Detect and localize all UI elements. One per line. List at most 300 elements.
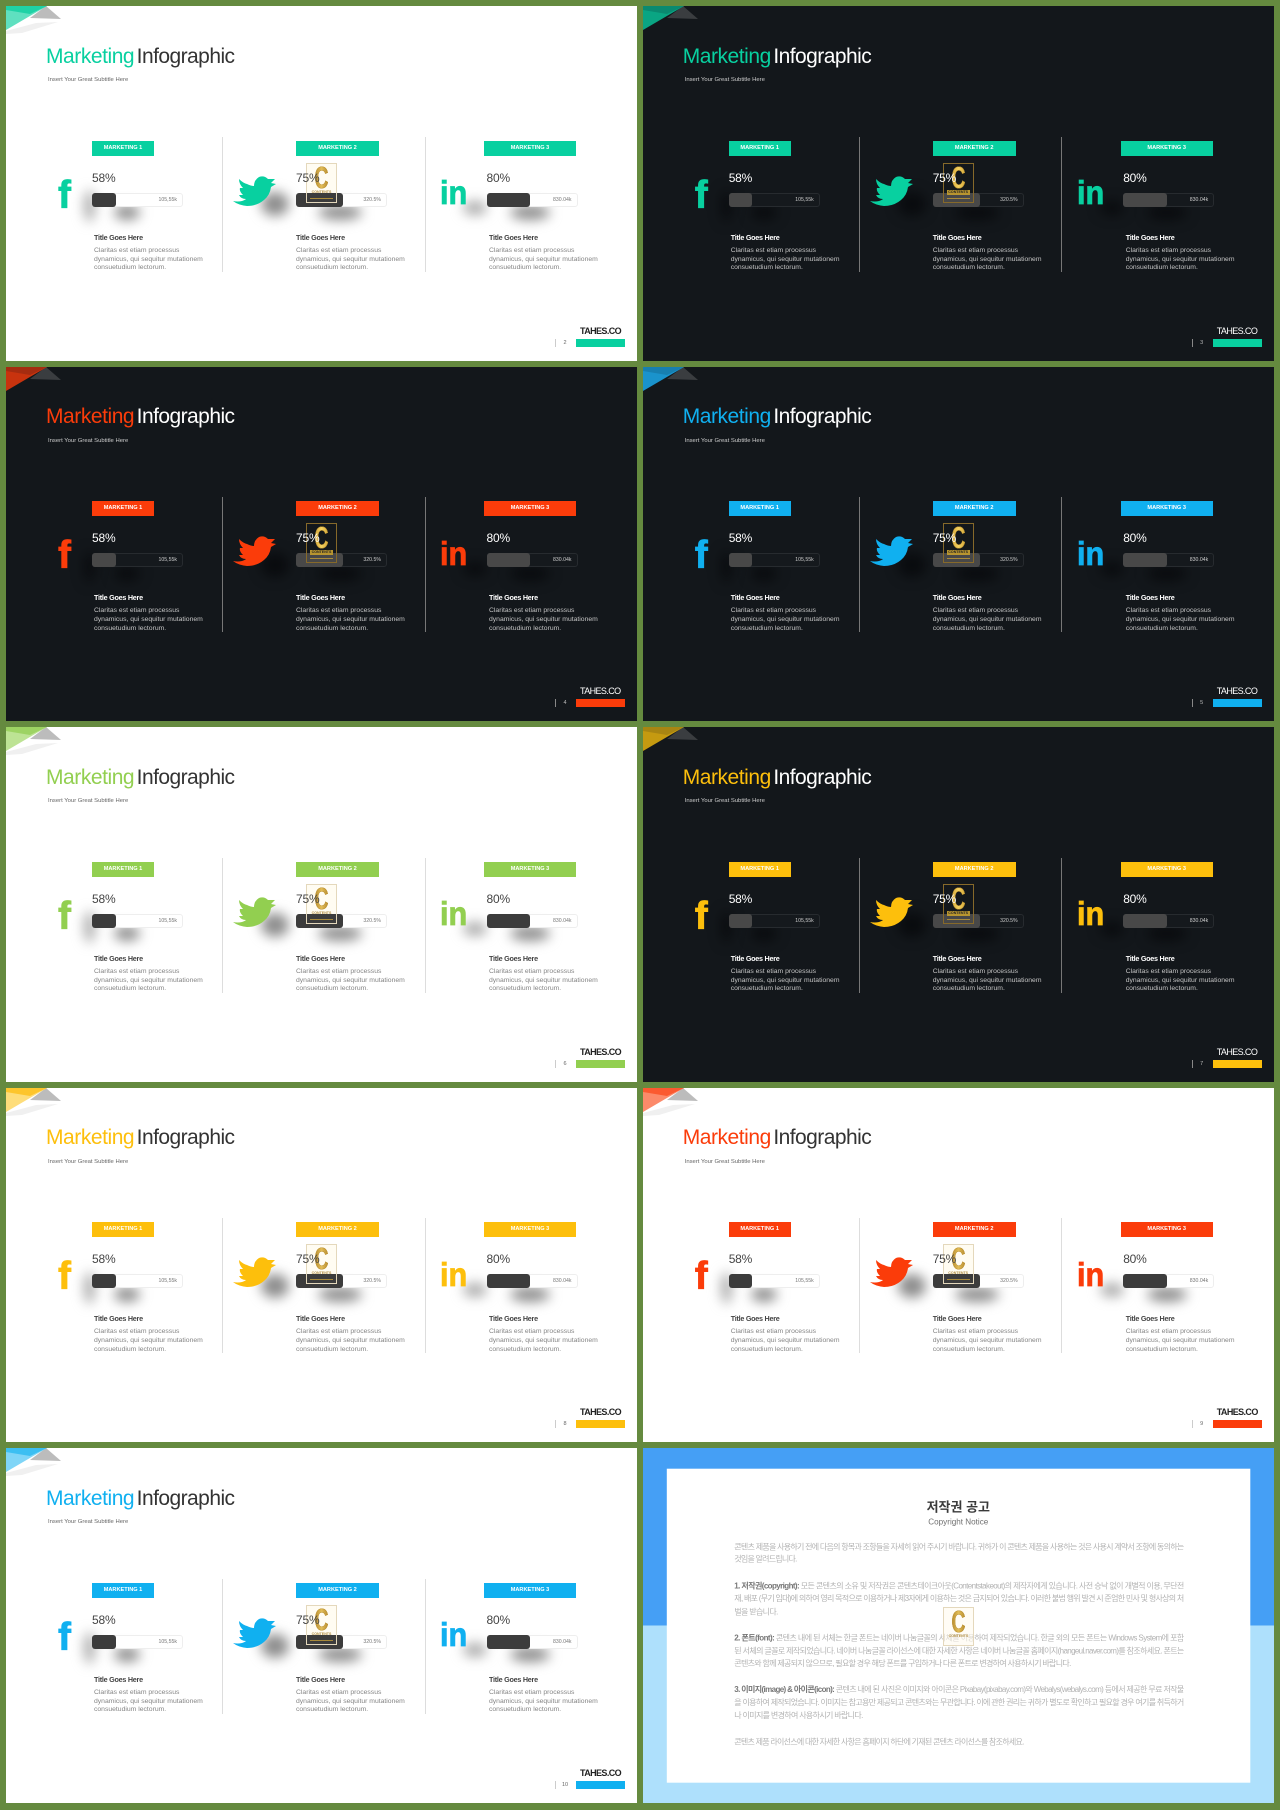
badge: MARKETING 1 [740,1226,779,1232]
brand: TAHES.CO [580,686,621,696]
shadow blob [261,913,289,937]
item text: Claritas est etiam processus [296,1689,381,1696]
shadow blob [898,192,926,216]
item title: Title Goes Here [933,233,982,242]
shadow blob [463,922,487,936]
subtitle: Insert Your Great Subtitle Here [685,438,765,444]
item text: dynamicus, qui sequitur mutationem [933,256,1042,263]
shadow blob [84,551,95,583]
item text: Claritas est etiam processus [489,1328,574,1335]
item title: Title Goes Here [296,233,345,242]
progress bar [486,553,578,567]
panel: slide 5, dark blue [643,367,1274,721]
item text: Claritas est etiam processus [94,1328,179,1335]
column: marketing 1 [693,1218,858,1358]
page number: 2 [563,340,567,346]
progress bar [92,193,183,207]
badge: MARKETING 2 [955,866,993,872]
item title: Title Goes Here [94,1675,143,1684]
icon: twitter [233,536,276,566]
item text: Claritas est etiam processus [489,1689,574,1696]
icon: linkedin: in [1077,535,1104,572]
page number: 7 [1200,1061,1203,1067]
percent: 58% [729,1252,752,1266]
shadow blob [114,1287,140,1302]
progress bar: 105,55k [795,197,814,203]
column: marketing 1 [58,141,203,271]
page number: 6 [563,1061,567,1067]
progress bar: 105,55k [159,1278,177,1284]
notice body: 재, 배포 (무기 임대)에 의하여 영리 목적으로 이용하거나 제3자에게 이용하는 것은 금지되어 있습니다. 이러한 불법 행위 발견 시 준엄한 민사 및 형사상의 처 [734,1593,1184,1603]
progress bar: 830.04k [1190,918,1208,924]
progress bar [92,1635,183,1649]
item text [489,1689,604,1715]
progress bar [296,553,387,567]
shadow blob [898,913,926,937]
watermark: CONTENTS [312,550,331,554]
item text: Claritas est etiam processus [1126,247,1211,254]
item title: Title Goes Here [731,1314,780,1323]
item text: Claritas est etiam processus [296,968,381,975]
footer bar [1213,339,1262,347]
percent: 58% [729,531,752,545]
column: marketing 1 [695,141,840,271]
item text [933,247,1042,271]
item text: consuetudium lectorum. [731,264,803,271]
item text [489,968,604,994]
shadow blob [261,1634,289,1658]
badge: MARKETING 2 [318,866,357,872]
shadow blob [721,551,732,583]
badge: MARKETING 1 [740,866,779,872]
title: MarketingInfographic [46,766,235,789]
badge [933,862,1016,877]
item text [489,1328,604,1354]
badge: MARKETING 2 [955,505,993,511]
shadow blob [114,926,140,941]
corner decoration [6,6,61,34]
shadow blob [1100,922,1124,936]
notice body: 것임을 알려드립니다. [734,1554,797,1564]
item text [296,247,405,271]
progress bar: 830.04k [553,1639,572,1645]
badge [1121,141,1213,156]
shadow blob [898,1274,926,1298]
title: MarketingInfographic [683,766,871,789]
progress bar [729,553,820,567]
watermark [943,1244,974,1284]
item text [933,968,1048,994]
icon: linkedin: in [440,1616,467,1653]
column: marketing 2 [865,857,1055,997]
item text: dynamicus, qui sequitur mutationem [296,1337,405,1344]
item text: Claritas est etiam processus [94,607,179,614]
shadow blob [721,190,732,222]
item title: Title Goes Here [1126,954,1175,963]
column: marketing 3 [1071,857,1236,997]
watermark [943,523,974,563]
footer bar [576,339,625,347]
badge [729,862,791,877]
column: marketing 2 [228,1578,418,1718]
progress bar [296,914,387,928]
item text: dynamicus, qui sequitur mutationem [1126,256,1234,263]
item text: Claritas est etiam processus [933,968,1018,975]
item text: dynamicus, qui sequitur mutationem [731,256,840,263]
watermark: CONTENTS [949,1634,968,1638]
icon: facebook: f [58,895,71,938]
shadow blob [318,1287,362,1302]
progress bar: 320.5% [363,918,381,924]
progress bar [1123,553,1214,567]
icon: twitter [870,897,913,927]
item text: consuetudium lectorum. [489,985,561,992]
badge [1121,501,1213,516]
progress bar: 320.5% [1000,1278,1018,1284]
percent: 75% [296,1252,319,1266]
brand: TAHES.CO [1217,1047,1257,1057]
item text [94,247,203,271]
watermark [306,523,337,563]
item text [731,607,840,632]
item title: Title Goes Here [489,593,538,602]
badge [92,1222,154,1237]
badge [484,141,576,156]
percent: 58% [92,171,115,185]
item title: Title Goes Here [489,1314,538,1323]
brand: TAHES.CO [580,326,621,336]
item text: dynamicus, qui sequitur mutationem [731,1337,840,1344]
item text [933,607,1042,632]
notice body: 된 서체의 글꼴로 제작되었습니다. 네이버 나눔글꼴 라이선스에 대한 자세한 사항은 네이버 나눔글꼴 홈페이지(hangeul.naver.com)를 참조하세요. 폰트는 [734,1646,1184,1656]
progress bar: 105,55k [795,918,814,924]
shadow blob [1100,562,1124,576]
subtitle: Insert Your Great Subtitle Here [685,798,765,804]
shadow blob [261,1274,289,1298]
icon: facebook: f [58,534,71,577]
badge [1121,1222,1213,1237]
item text [1126,247,1234,271]
footer bar [1213,1060,1262,1068]
percent: 80% [486,1252,510,1266]
percent: 58% [92,531,115,545]
item text: consuetudium lectorum. [489,1706,561,1713]
item text: Claritas est etiam processus [1126,1328,1211,1335]
shadow blob [1147,1287,1187,1302]
item text: Claritas est etiam processus [489,968,574,975]
item text: Claritas est etiam processus [933,1328,1018,1335]
item text: dynamicus, qui sequitur mutationem [731,977,840,984]
watermark: CONTENTS [312,1632,331,1636]
badge [729,141,791,156]
panel: slide 8, white yellow [6,1088,637,1442]
progress bar [729,914,820,928]
item text [296,1328,411,1354]
icon: linkedin: in [440,895,467,932]
item text: dynamicus, qui sequitur mutationem [296,1698,405,1705]
item text: Claritas est etiam processus [94,1689,179,1696]
badge [296,862,379,877]
subtitle: Insert Your Great Subtitle Here [48,1159,128,1165]
icon: twitter [870,176,913,206]
progress bar [933,553,1024,567]
white notice card [643,1448,1274,1803]
progress bar: 830.04k [1190,557,1208,563]
progress bar [729,1274,820,1288]
page number: 5 [1200,700,1203,706]
badge: MARKETING 3 [511,866,549,872]
progress bar [933,914,1024,928]
item text: consuetudium lectorum. [94,985,166,992]
badge [484,501,576,516]
item title: Title Goes Here [731,593,780,602]
page number: 10 [562,1782,568,1788]
footer bar [576,1420,625,1428]
column: marketing 1 [58,501,203,632]
notice heading: 저작권 공고 [926,1500,990,1515]
shadow blob [463,562,487,576]
brand: TAHES.CO [1217,326,1257,336]
item title: Title Goes Here [296,1675,345,1684]
icon: linkedin: in [440,1256,467,1293]
percent: 58% [729,892,752,906]
progress bar [729,193,820,207]
item text: dynamicus, qui sequitur mutationem [296,977,405,984]
shadow blob [84,190,95,222]
shadow blob [751,205,777,220]
progress bar: 830.04k [553,197,572,203]
percent: 58% [92,892,115,906]
percent: 75% [296,1613,319,1627]
progress bar: 830.04k [553,1278,572,1284]
shadow blob [463,1643,487,1657]
item text: Claritas est etiam processus [731,607,816,614]
item text: consuetudium lectorum. [489,1346,561,1353]
notice body: 1. 저작권(copyright): 모든 콘텐츠의 소유 및 저작권은 콘텐츠테이크아웃(Contentstakeout)의 제작자에게 있습니다. 사전 승낙 없이 개별적 이용, 무단전 [734,1581,1184,1591]
item text [296,607,405,632]
badge: MARKETING 3 [511,1226,549,1232]
badge [92,862,154,877]
shadow blob [510,1287,550,1302]
item text [94,607,203,632]
item text: consuetudium lectorum. [933,625,1005,632]
progress bar: 320.5% [1000,557,1018,563]
item text: consuetudium lectorum. [1126,985,1198,992]
item text [731,968,846,994]
subtitle: Insert Your Great Subtitle Here [48,77,128,83]
subtitle: Insert Your Great Subtitle Here [685,77,765,83]
shadow blob [463,201,487,215]
shadow blob [721,1272,732,1304]
brand: TAHES.CO [1217,686,1257,696]
panel: slide 6, white green [6,727,637,1082]
item text: consuetudium lectorum. [296,1706,368,1713]
brand: TAHES.CO [1217,1407,1258,1417]
item title: Title Goes Here [489,233,538,242]
badge [92,141,154,156]
item text: consuetudium lectorum. [489,264,561,271]
column: marketing 1 [693,857,858,997]
watermark [306,163,337,203]
progress bar: 320.5% [363,1639,381,1645]
badge [729,501,791,516]
shadow blob [114,566,140,581]
progress bar [486,1635,578,1649]
shadow blob [510,926,550,941]
badge [92,1583,154,1598]
badge [933,1222,1016,1237]
footer bar [576,1781,625,1789]
item text [731,247,840,271]
item text: consuetudium lectorum. [933,264,1005,271]
page number: 4 [563,700,567,706]
item text: dynamicus, qui sequitur mutationem [296,616,405,623]
progress bar: 320.5% [1000,197,1018,203]
title: MarketingInfographic [683,405,871,428]
corner decoration [6,727,61,755]
notice body: 나 이미지를 변경하여 사용하시기 바랍니다. [734,1710,863,1720]
progress bar: 320.5% [363,1278,381,1284]
badge [933,141,1016,156]
panel: copyright notice [643,1448,1274,1803]
item text: consuetudium lectorum. [296,625,368,632]
title: MarketingInfographic [46,1126,235,1149]
badge: MARKETING 3 [511,145,549,151]
shadow blob [114,1647,140,1662]
item title: Title Goes Here [933,593,982,602]
badge: MARKETING 1 [104,1226,142,1232]
panel: slide 4, dark red [6,367,637,721]
badge: MARKETING 1 [104,145,142,151]
icon: twitter [233,1257,276,1287]
shadow blob [84,1632,95,1664]
item text: dynamicus, qui sequitur mutationem [94,977,203,984]
item title: Title Goes Here [1126,593,1175,602]
shadow blob [1147,926,1187,941]
column: marketing 3 [1071,1218,1236,1358]
progress bar [1123,1274,1214,1288]
badge [933,501,1016,516]
badge: MARKETING 3 [1147,505,1186,511]
shadow blob [751,1287,777,1302]
shadow blob [261,553,289,577]
item title: Title Goes Here [296,593,345,602]
item title: Title Goes Here [933,954,982,963]
badge: MARKETING 3 [511,505,549,511]
page number: 9 [1200,1421,1203,1427]
percent: 75% [933,892,956,906]
item title: Title Goes Here [296,1314,345,1323]
progress bar: 830.04k [553,557,572,563]
item text: consuetudium lectorum. [94,1706,166,1713]
progress bar [296,193,387,207]
item text [1126,968,1241,994]
progress bar [1123,193,1214,207]
item text: Claritas est etiam processus [731,1328,816,1335]
panel: slide 10, white blue [6,1448,637,1803]
item text: dynamicus, qui sequitur mutationem [1126,977,1234,984]
progress bar: 105,55k [795,557,814,563]
badge: MARKETING 3 [1147,1226,1186,1232]
panel: slide 3, dark teal [643,6,1274,361]
item text [731,1328,846,1354]
item text: dynamicus, qui sequitur mutationem [1126,616,1234,623]
item text [489,247,598,271]
brand: TAHES.CO [580,1047,621,1057]
shadow blob [510,566,550,581]
shadow blob [721,911,732,943]
corner decoration [6,1088,66,1120]
title: MarketingInfographic [46,45,235,68]
progress bar: 105,55k [159,197,177,203]
footer bar [576,1060,625,1068]
shadow blob [955,205,999,220]
item title: Title Goes Here [296,954,345,963]
progress bar [486,1274,578,1288]
progress bar: 830.04k [553,918,572,924]
progress bar [486,193,578,207]
percent: 58% [92,1613,115,1627]
panel: slide 9, white red [643,1088,1274,1442]
item text: Claritas est etiam processus [489,607,574,614]
progress bar [486,914,578,928]
shadow blob [318,926,362,941]
icon: facebook: f [58,174,71,217]
progress bar [92,553,183,567]
item text [94,968,203,992]
percent: 80% [1123,171,1147,185]
column: marketing 3 [1061,497,1234,632]
brand: TAHES.CO [580,1768,621,1778]
item text [1126,1328,1241,1354]
badge: MARKETING 1 [740,145,779,151]
item text [1126,607,1234,632]
icon: linkedin: in [1077,1256,1104,1293]
item text: Claritas est etiam processus [94,968,179,975]
column: marketing 2 [222,137,405,272]
badge: MARKETING 3 [1147,145,1186,151]
shadow blob [751,926,777,941]
notice body: 콘텐츠와 함께 제공되지 않으므로, 필요할 경우 해당 폰트를 구입하거나 다른 폰트로 변경하여 사용하시기 바랍니다. [734,1658,1071,1668]
item text: dynamicus, qui sequitur mutationem [731,616,840,623]
notice body: 을 이용하여 제작되었습니다. 이미지는 참고용만 제공되고 콘텐츠와는 무관합니다. 이에 관한 권리는 귀하가 별도로 확인하고 필요할 경우 여기를 취득하거 [734,1697,1184,1707]
notice body [734,1542,1185,1747]
item text: Claritas est etiam processus [296,247,381,254]
icon: twitter [870,536,913,566]
column: marketing 2 [859,137,1042,272]
item text: dynamicus, qui sequitur mutationem [933,977,1042,984]
percent: 80% [486,531,510,545]
shadow blob [1100,201,1124,215]
badge [1121,862,1213,877]
badge: MARKETING 1 [740,505,779,511]
notice body: 벌을 받습니다. [734,1607,778,1617]
brand: TAHES.CO [580,1407,621,1417]
shadow blob [1147,205,1187,220]
shadow blob [318,566,362,581]
item text: dynamicus, qui sequitur mutationem [94,616,203,623]
badge [484,862,576,877]
percent: 80% [1123,531,1147,545]
column: marketing 1 [695,501,840,632]
progress bar [296,1274,387,1288]
watermark: CONTENTS [312,190,331,194]
item title: Title Goes Here [1126,233,1175,242]
footer bar [576,699,625,707]
item text: Claritas est etiam processus [1126,968,1211,975]
watermark [943,163,974,203]
shadow blob [1100,1283,1124,1297]
